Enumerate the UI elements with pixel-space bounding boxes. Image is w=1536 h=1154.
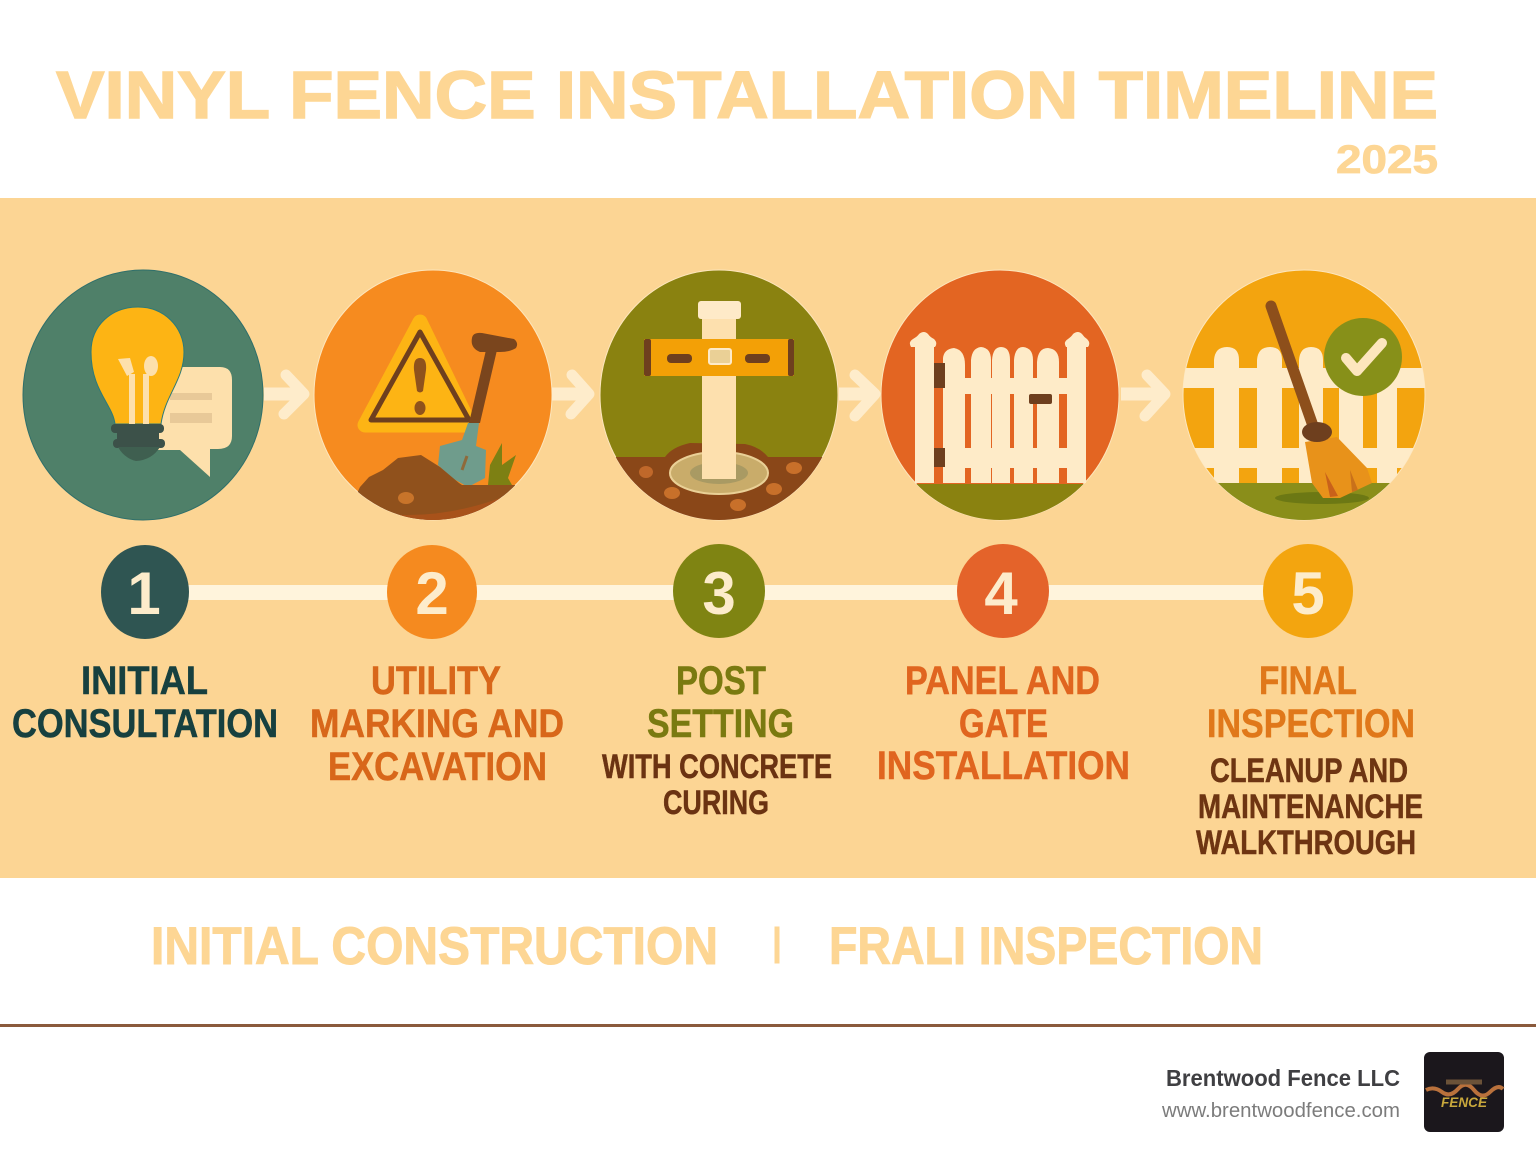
icon: broom xyxy=(1271,306,1372,498)
icon: grass xyxy=(1218,483,1390,520)
label: step 5 xyxy=(1196,659,1423,862)
step 1 illustration: idea and consultation xyxy=(23,270,263,520)
step number 2: 2 xyxy=(415,560,449,627)
step number 3 xyxy=(673,544,765,638)
icon: speech bubble xyxy=(155,367,232,477)
logo: FENCE xyxy=(1441,1094,1488,1110)
footer company name: Brentwood Fence LLC xyxy=(1166,1065,1400,1091)
label: step 2: EXCAVATION xyxy=(328,745,547,789)
label: step 3 xyxy=(602,659,832,822)
icon: fence xyxy=(1180,347,1430,483)
step number 5: 5 xyxy=(1291,560,1325,627)
icon: gate pickets xyxy=(910,332,1089,483)
label: step 2 xyxy=(310,659,564,789)
summary line: INITIAL CONSTRUCTION xyxy=(151,917,718,976)
footer rule xyxy=(0,1024,1536,1027)
icon: soil mound xyxy=(358,455,515,520)
label: step 3: WITH CONCRETE xyxy=(602,748,832,786)
summary line xyxy=(151,917,1263,976)
icon: light bulb xyxy=(91,307,184,461)
arrow 4 xyxy=(1121,375,1165,416)
label: step 5: FINAL xyxy=(1259,659,1357,703)
summary line: FRALI INSPECTION xyxy=(829,917,1263,976)
icon: check badge xyxy=(1324,318,1402,396)
label: step 5: MAINTENANCHE xyxy=(1198,788,1423,826)
step 4 illustration: panel and gate xyxy=(880,270,1120,530)
step 3 illustration: post setting xyxy=(600,270,838,520)
title: VINYL FENCE INSTALLATION TIMELINE xyxy=(56,58,1438,133)
icon: ground xyxy=(916,484,1084,520)
icon: concrete footing xyxy=(670,452,768,494)
footer website: www.brentwoodfence.com xyxy=(1161,1100,1400,1122)
label: step 3: POST xyxy=(676,659,766,703)
icon: warning sign xyxy=(365,322,470,425)
label: step 2: UTILITY xyxy=(371,659,501,703)
arrow 2 xyxy=(552,375,589,414)
label: step 1 xyxy=(12,659,278,746)
year: 2025 xyxy=(1336,138,1438,182)
step number 4: 4 xyxy=(984,560,1018,627)
icon: hinges and latch xyxy=(934,363,1052,467)
step 5 illustration: final inspection xyxy=(1180,270,1430,528)
arrow 1 xyxy=(264,375,304,414)
icon: shovel xyxy=(438,333,517,487)
step number 3: 3 xyxy=(702,560,736,627)
logo xyxy=(1424,1052,1504,1132)
step number 5 xyxy=(1263,544,1353,638)
icon: soil xyxy=(616,443,822,520)
label: step 5: INSPECTION xyxy=(1207,702,1415,746)
label: step 4: GATE xyxy=(959,702,1048,746)
icon: grass xyxy=(488,443,516,485)
label: step 5: CLEANUP AND xyxy=(1210,752,1408,790)
icon: post xyxy=(698,301,741,479)
label: step 3: CURING xyxy=(663,784,769,822)
panel: timeline band xyxy=(0,198,1536,878)
label: step 4: PANEL AND xyxy=(905,659,1100,703)
arrow 3 xyxy=(839,375,875,416)
step number 4 xyxy=(957,544,1049,638)
timeline connector xyxy=(186,585,1266,600)
label: step 4: INSTALLATION xyxy=(877,744,1130,788)
label: step 1: INITIAL xyxy=(81,659,208,703)
label: step 2: MARKING AND xyxy=(310,702,564,746)
icon: level xyxy=(644,339,794,376)
step number 2 xyxy=(387,545,477,639)
label: step 3: SETTING xyxy=(647,702,794,746)
step number 1 xyxy=(101,545,189,639)
step 2 illustration: utility marking and excavation xyxy=(314,270,552,530)
step number 1: 1 xyxy=(127,560,161,627)
label: step 4 xyxy=(877,659,1130,788)
label: step 1: CONSULTATION xyxy=(12,702,278,746)
label: step 5: WALKTHROUGH xyxy=(1196,824,1416,862)
